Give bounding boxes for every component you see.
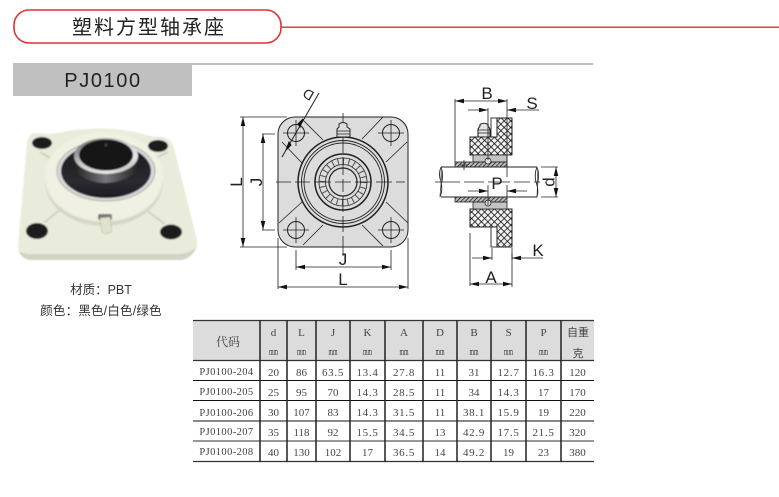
row 205: 28.5 <box>393 387 415 399</box>
grease nipple <box>478 123 490 137</box>
product photo: plastic square bearing housing <box>18 128 197 260</box>
row 206: PJ0100-206 <box>199 408 254 419</box>
row 207: 92 <box>328 427 338 439</box>
row 204: 11 <box>435 367 445 379</box>
row 206: 83 <box>328 407 339 419</box>
mounting holes <box>283 120 404 243</box>
model heading band <box>13 63 593 96</box>
row 208: 130 <box>293 447 310 459</box>
balls <box>485 158 491 164</box>
front view technical drawing: L <box>227 177 246 187</box>
front view technical drawing: L <box>338 270 348 289</box>
material caption <box>40 283 162 318</box>
row 205: 95 <box>296 387 308 399</box>
row 206: 19 <box>538 407 550 419</box>
row 205: 17 <box>538 387 550 399</box>
row 206: 31.5 <box>393 407 415 419</box>
set screw <box>460 160 468 170</box>
row 208 <box>199 447 586 459</box>
table header labels: A <box>400 327 408 339</box>
row 206: 30 <box>268 407 280 419</box>
row 206: 38.1 <box>463 407 485 419</box>
model heading band: PJ0100 <box>64 70 142 92</box>
front view technical drawing: J <box>339 250 347 269</box>
row 204: 12.7 <box>497 367 520 379</box>
side section view technical drawing: B <box>481 84 493 103</box>
front view technical drawing: D <box>300 85 317 104</box>
center lines <box>276 113 405 256</box>
dimension L left <box>240 117 287 247</box>
row 204: 86 <box>296 367 308 379</box>
hatched housing section <box>470 118 512 155</box>
row 206: 220 <box>569 407 586 419</box>
table header labels: mm <box>297 347 306 358</box>
shaft <box>441 167 537 197</box>
dimension D hole <box>282 93 319 157</box>
row 207: 34.5 <box>393 427 415 439</box>
table grid <box>193 320 594 462</box>
specification table <box>193 320 594 462</box>
row 207 <box>199 427 586 439</box>
table header labels: mm <box>363 347 372 358</box>
dimension J left <box>262 134 275 230</box>
row 208: 36.5 <box>393 447 415 459</box>
row 205: PJ0100-205 <box>199 387 254 398</box>
table header labels: mm <box>470 347 479 358</box>
table header background <box>193 321 594 360</box>
corner lobe lines <box>279 117 408 246</box>
dimension S <box>468 109 488 111</box>
row 207: 15.5 <box>356 427 379 439</box>
dimension K <box>492 248 512 260</box>
red header rule <box>281 26 779 28</box>
housing plate <box>278 117 408 247</box>
table header labels: mm <box>400 347 409 358</box>
table header labels: mm <box>436 347 445 358</box>
dimension J bottom <box>296 250 391 270</box>
bearing rings <box>298 137 388 227</box>
row 207: PJ0100-207 <box>199 427 254 438</box>
dimension B <box>455 99 507 177</box>
dimension L bottom <box>278 238 408 289</box>
dimension d <box>541 167 558 197</box>
row 204 <box>199 367 586 379</box>
row 204: 20 <box>268 367 280 379</box>
side section view technical drawing: K <box>532 241 544 260</box>
table header labels: 自重 <box>567 325 589 339</box>
table header labels <box>216 325 589 360</box>
table header labels: mm <box>504 347 513 358</box>
row 204: PJ0100-204 <box>199 367 254 378</box>
side section view technical drawing: S <box>526 94 538 113</box>
side section view technical drawing: P <box>491 174 503 193</box>
material caption: 材质：PBT <box>70 283 132 297</box>
row 207: 13 <box>434 427 446 439</box>
row 205: 70 <box>328 387 339 399</box>
row 205 <box>199 387 586 399</box>
side section view technical drawing <box>435 84 558 287</box>
row 206: 15.9 <box>497 407 520 419</box>
inner sleeve <box>455 162 507 167</box>
front view technical drawing <box>227 85 408 289</box>
row 208: 19 <box>503 447 514 459</box>
row 208: 380 <box>569 447 586 459</box>
title pill <box>14 10 281 43</box>
row 207: 17.5 <box>497 427 520 439</box>
row 206 <box>199 407 586 419</box>
row 204: 13.4 <box>356 367 379 379</box>
row 208: 14 <box>434 447 446 459</box>
table header labels: B <box>470 327 478 339</box>
table header labels: P <box>540 327 547 339</box>
row 207: 320 <box>569 427 586 439</box>
row 207: 21.5 <box>532 427 555 439</box>
row 204: 120 <box>569 367 586 379</box>
row 205: 11 <box>435 387 445 399</box>
row 207: 42.9 <box>463 427 485 439</box>
table header labels: D <box>436 327 444 339</box>
table header labels: K <box>364 327 372 339</box>
row 204: 16.3 <box>532 367 555 379</box>
table header labels: L <box>298 327 305 339</box>
thin flange strip <box>491 118 497 137</box>
row 205: 170 <box>569 387 586 399</box>
row 207: 35 <box>268 427 280 439</box>
row 206: 11 <box>435 407 445 419</box>
dimension P <box>468 190 488 192</box>
row 205: 14.3 <box>497 387 520 399</box>
row 208: 23 <box>538 447 550 459</box>
row 204: 63.5 <box>322 367 344 379</box>
row 206: 14.3 <box>356 407 379 419</box>
row 208: 49.2 <box>463 447 485 459</box>
row 206: 107 <box>293 407 310 419</box>
grease nipple <box>337 122 350 137</box>
bearing outer race <box>473 155 507 162</box>
row 204: 31 <box>468 367 480 379</box>
table header labels: d <box>271 327 277 339</box>
row 204: 27.8 <box>393 367 415 379</box>
table header labels: 代码 <box>216 335 240 349</box>
side section view technical drawing: d <box>540 177 558 187</box>
row 205: 34 <box>468 387 480 399</box>
dimension A <box>470 233 512 287</box>
table header labels: 克 <box>572 347 584 360</box>
table header labels: S <box>505 327 512 339</box>
front view technical drawing: J <box>247 178 266 186</box>
row 207: 118 <box>293 427 310 439</box>
row 208: 102 <box>325 447 341 459</box>
row 208: 40 <box>268 447 280 459</box>
table header labels: mm <box>269 347 278 358</box>
row 205: 14.3 <box>356 387 379 399</box>
table header labels: mm <box>328 347 338 358</box>
row 208: PJ0100-208 <box>199 447 254 458</box>
row 208: 17 <box>362 447 374 459</box>
row 205: 25 <box>268 387 280 399</box>
side section view technical drawing: A <box>485 268 497 287</box>
material caption: 颜色：黑色/白色/绿色 <box>40 303 162 318</box>
table header labels: mm <box>539 347 548 358</box>
table header labels: J <box>331 327 336 339</box>
title pill: 塑料方型轴承座 <box>72 16 226 39</box>
center line <box>435 181 540 183</box>
